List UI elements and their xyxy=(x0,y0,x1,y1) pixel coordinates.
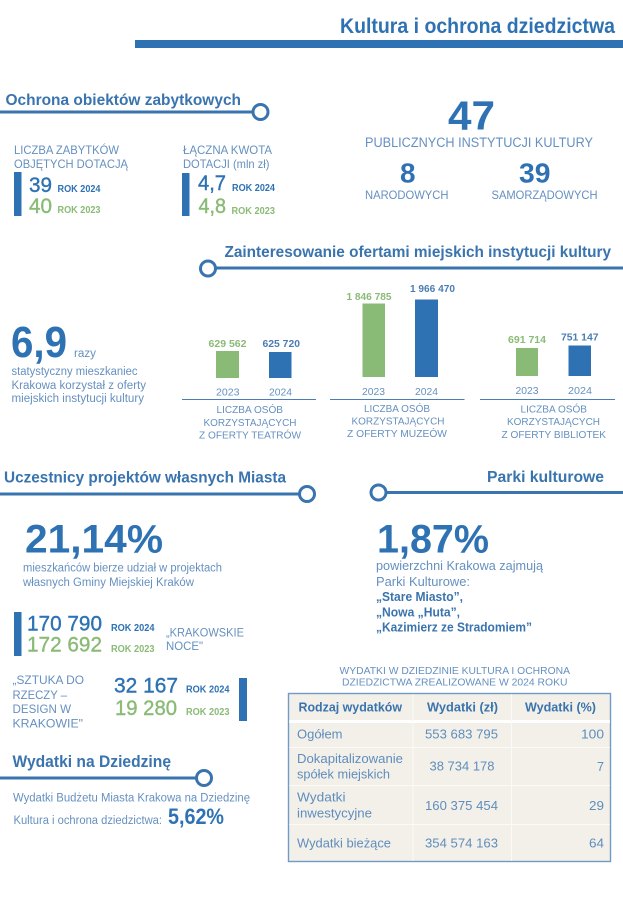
stat: 21,14%: mieszkańców bierze udział w projektach xyxy=(23,562,222,574)
bar chart: teatry: LICZBA OSÓB xyxy=(216,403,283,416)
section heading: Ochrona obiektów zabytkowych: Ochrona obiektów zabytkowych xyxy=(6,92,241,109)
table row: Wydatki bieżące: 64 xyxy=(589,836,604,850)
stat: Krakowskie Noce: „KRAKOWSKIE xyxy=(166,626,244,640)
stat: Krakowskie Noce: ROK 2024 xyxy=(111,623,155,634)
table header row: Rodzaj wydatków xyxy=(298,700,402,714)
section heading: Wydatki na Dziedzinę xyxy=(0,753,212,786)
bar chart: biblioteki: LICZBA OSÓB xyxy=(520,402,587,416)
bar chart: muzea: 2024 xyxy=(415,386,438,398)
stat: 1,87% xyxy=(376,518,544,634)
table row: Dokapitalizowanie: spółek miejskich xyxy=(297,766,390,782)
page header xyxy=(135,15,623,48)
bar chart: muzea: LICZBA OSÓB xyxy=(364,402,430,415)
stat: liczba zabytków objętych dotacją: 40 xyxy=(29,195,52,218)
table title: WYDATKI W DZIEDZINIE KULTURA I OCHRONA xyxy=(340,666,570,677)
stat: Sztuka do rzeczy: 32 167 xyxy=(114,674,178,698)
table row: Wydatki inwestycyjne: 29 xyxy=(589,798,604,813)
section heading: Uczestnicy projektów własnych Miasta xyxy=(0,470,314,502)
table row: Ogółem: Ogółem xyxy=(297,726,342,742)
stat: 47 publicznych instytucji kultury xyxy=(365,92,598,202)
stat: 5,62%: Wydatki Budżetu Miasta Krakowa na Dziedzinę xyxy=(13,792,250,804)
stat: liczba zabytków objętych dotacją xyxy=(14,142,129,218)
stat: Krakowskie Noce: NOCE" xyxy=(166,639,203,653)
table row: Wydatki bieżące: 354 574 163 xyxy=(425,836,498,850)
stat: 47 publicznych instytucji kultury: 39 xyxy=(519,158,550,188)
stat: Krakowskie Noce xyxy=(14,612,244,656)
table row: Wydatki bieżące: Wydatki bieżące xyxy=(297,836,391,850)
table row: Dokapitalizowanie: 7 xyxy=(597,759,604,774)
bar chart: biblioteki: 2024 xyxy=(568,385,592,397)
stat: Sztuka do rzeczy: 19 280 xyxy=(115,697,177,720)
section heading: Parki kulturowe xyxy=(371,469,623,500)
bar chart: biblioteki: KORZYSTAJĄCYCH xyxy=(507,417,600,428)
stat: 6,9 razy: 6,9 xyxy=(11,318,67,367)
table row: Wydatki inwestycyjne: Wydatki xyxy=(297,790,346,804)
table row: Wydatki inwestycyjne: 160 375 454 xyxy=(425,798,498,813)
bar chart: biblioteki: 751 147 xyxy=(561,332,599,344)
section heading: Zainteresowanie ofertami: Zainteresowanie ofertami miejskich instytucji kultury xyxy=(224,244,611,261)
bar chart: teatry: 629 562 xyxy=(208,338,247,350)
section heading: Ochrona obiektów zabytkowych xyxy=(0,92,268,120)
stat: Sztuka do rzeczy: ROK 2023 xyxy=(186,707,230,718)
bar chart: muzea: 1 966 470 xyxy=(410,284,455,295)
stat: 5,62% xyxy=(13,792,250,829)
bar chart: teatry: Z OFERTY TEATRÓW xyxy=(199,428,302,442)
stat: 47 publicznych instytucji kultury: 8 xyxy=(400,158,416,188)
stat: 1,87%: „Nowa „Huta”, xyxy=(376,606,460,620)
table header row xyxy=(298,700,596,714)
stat: łączna kwota dotacji: 4,7 xyxy=(198,172,226,195)
stat: Krakowskie Noce: ROK 2023 xyxy=(111,644,155,655)
stat: łączna kwota dotacji: DOTACJI (mln zł) xyxy=(183,157,270,171)
stat: łączna kwota dotacji: ROK 2023 xyxy=(232,206,275,217)
section heading: Uczestnicy projektów własnych Miasta: Uczestnicy projektów własnych Miasta xyxy=(4,470,286,486)
stat: Sztuka do rzeczy: RZECZY – xyxy=(12,688,67,702)
section heading: Zainteresowanie ofertami xyxy=(200,244,623,276)
table row: Wydatki bieżące xyxy=(297,836,604,850)
stat: 6,9 razy xyxy=(11,318,146,405)
table row: Dokapitalizowanie: 38 734 178 xyxy=(430,758,494,774)
stat: liczba zabytków objętych dotacją: OBJĘTYCH DOTACJĄ xyxy=(14,157,129,171)
stat: łączna kwota dotacji: ŁĄCZNA KWOTA xyxy=(183,143,272,157)
stat: łączna kwota dotacji xyxy=(182,143,275,218)
section heading: Parki kulturowe: Parki kulturowe xyxy=(487,469,604,486)
stat: 1,87%: 1,87% xyxy=(377,518,489,562)
stat: 6,9 razy: miejskich instytucji kultury xyxy=(12,393,144,405)
table title xyxy=(340,666,570,688)
bar chart: teatry: 2024 xyxy=(269,386,292,398)
stat: 21,14%: własnych Gminy Miejskiej Kraków xyxy=(22,577,195,589)
stat: Krakowskie Noce: 170 790 xyxy=(27,612,102,636)
table row: Dokapitalizowanie xyxy=(297,751,604,782)
stat: 5,62%: 5,62% xyxy=(168,804,224,829)
bar chart: muzea: 2023 xyxy=(362,386,385,398)
stat: Sztuka do rzeczy: DESIGN W xyxy=(12,702,72,716)
stat: 47 publicznych instytucji kultury: NARODOWYCH xyxy=(365,188,448,202)
stat: 1,87%: „Kazimierz ze Stradomiem” xyxy=(376,620,532,634)
stat: Sztuka do rzeczy: ROK 2024 xyxy=(186,684,230,696)
stat: 1,87%: powierzchni Krakowa zajmują xyxy=(376,558,544,573)
stat: liczba zabytków objętych dotacją: ROK 2023 xyxy=(58,205,101,216)
stat: łączna kwota dotacji: 4,8 xyxy=(198,195,226,218)
section heading: Wydatki na Dziedzinę: Wydatki na Dziedzinę xyxy=(12,753,171,771)
stat: 6,9 razy: statystyczny mieszkaniec xyxy=(12,366,138,378)
bar chart: biblioteki: 2023 xyxy=(516,385,539,397)
bar chart: biblioteki: 691 714 xyxy=(508,334,546,346)
stat: Krakowskie Noce: 172 692 xyxy=(27,634,102,656)
table row: Ogółem xyxy=(297,726,604,742)
table row: Ogółem: 100 xyxy=(581,726,604,742)
stat: Sztuka do rzeczy: „SZTUKA DO xyxy=(12,673,84,687)
stat: Sztuka do rzeczy: KRAKOWIE" xyxy=(12,716,83,730)
table row: Wydatki inwestycyjne: inwestycyjne xyxy=(297,806,372,820)
stat: 21,14% xyxy=(22,518,222,589)
stat: 47 publicznych instytucji kultury: PUBLICZNYCH INSTYTUCJI KULTURY xyxy=(365,135,593,150)
stat: liczba zabytków objętych dotacją: LICZBA ZABYTKÓW xyxy=(14,142,120,157)
stat: liczba zabytków objętych dotacją: ROK 2024 xyxy=(58,184,101,195)
bar chart: muzea: KORZYSTAJĄCYCH xyxy=(352,416,444,428)
bar chart: teatry xyxy=(182,338,316,442)
stat: 1,87%: „Stare Miasto”, xyxy=(376,590,463,604)
table header row: Wydatki (zł) xyxy=(427,700,498,714)
table title: DZIEDZICTWA ZREALIZOWANE W 2024 ROKU xyxy=(342,678,568,688)
stat: 1,87%: Parki Kulturowe: xyxy=(376,574,470,589)
bar chart: teatry: KORZYSTAJĄCYCH xyxy=(204,418,296,429)
stat: Sztuka do rzeczy xyxy=(12,673,247,730)
stat: 47 publicznych instytucji kultury: 47 xyxy=(448,92,495,138)
bar chart: muzea: 1 846 785 xyxy=(346,292,392,303)
stat: 47 publicznych instytucji kultury: SAMORZĄDOWYCH xyxy=(492,188,598,202)
bar chart: biblioteki xyxy=(480,332,615,441)
table row: Wydatki inwestycyjne xyxy=(297,790,604,820)
stat: 21,14%: 21,14% xyxy=(25,518,163,562)
bar chart: muzea: Z OFERTY MUZEÓW xyxy=(347,427,448,440)
table row: Ogółem: 553 683 795 xyxy=(425,726,498,742)
stat: liczba zabytków objętych dotacją: 39 xyxy=(29,174,52,197)
stat: 5,62%: Kultura i ochrona dziedzictwa: xyxy=(14,815,162,827)
stat: 6,9 razy: razy xyxy=(74,348,96,360)
bar chart: teatry: 2023 xyxy=(216,386,240,398)
stat: 6,9 razy: Krakowa korzystał z oferty xyxy=(12,380,146,392)
table: wydatki xyxy=(288,694,610,862)
stat: łączna kwota dotacji: ROK 2024 xyxy=(232,183,275,194)
table row: Dokapitalizowanie: Dokapitalizowanie xyxy=(297,751,403,766)
bar chart: biblioteki: Z OFERTY BIBLIOTEK xyxy=(502,430,606,441)
bar chart: muzea xyxy=(330,284,464,440)
bar chart: teatry: 625 720 xyxy=(262,338,300,350)
table header row: Wydatki (%) xyxy=(525,700,596,714)
